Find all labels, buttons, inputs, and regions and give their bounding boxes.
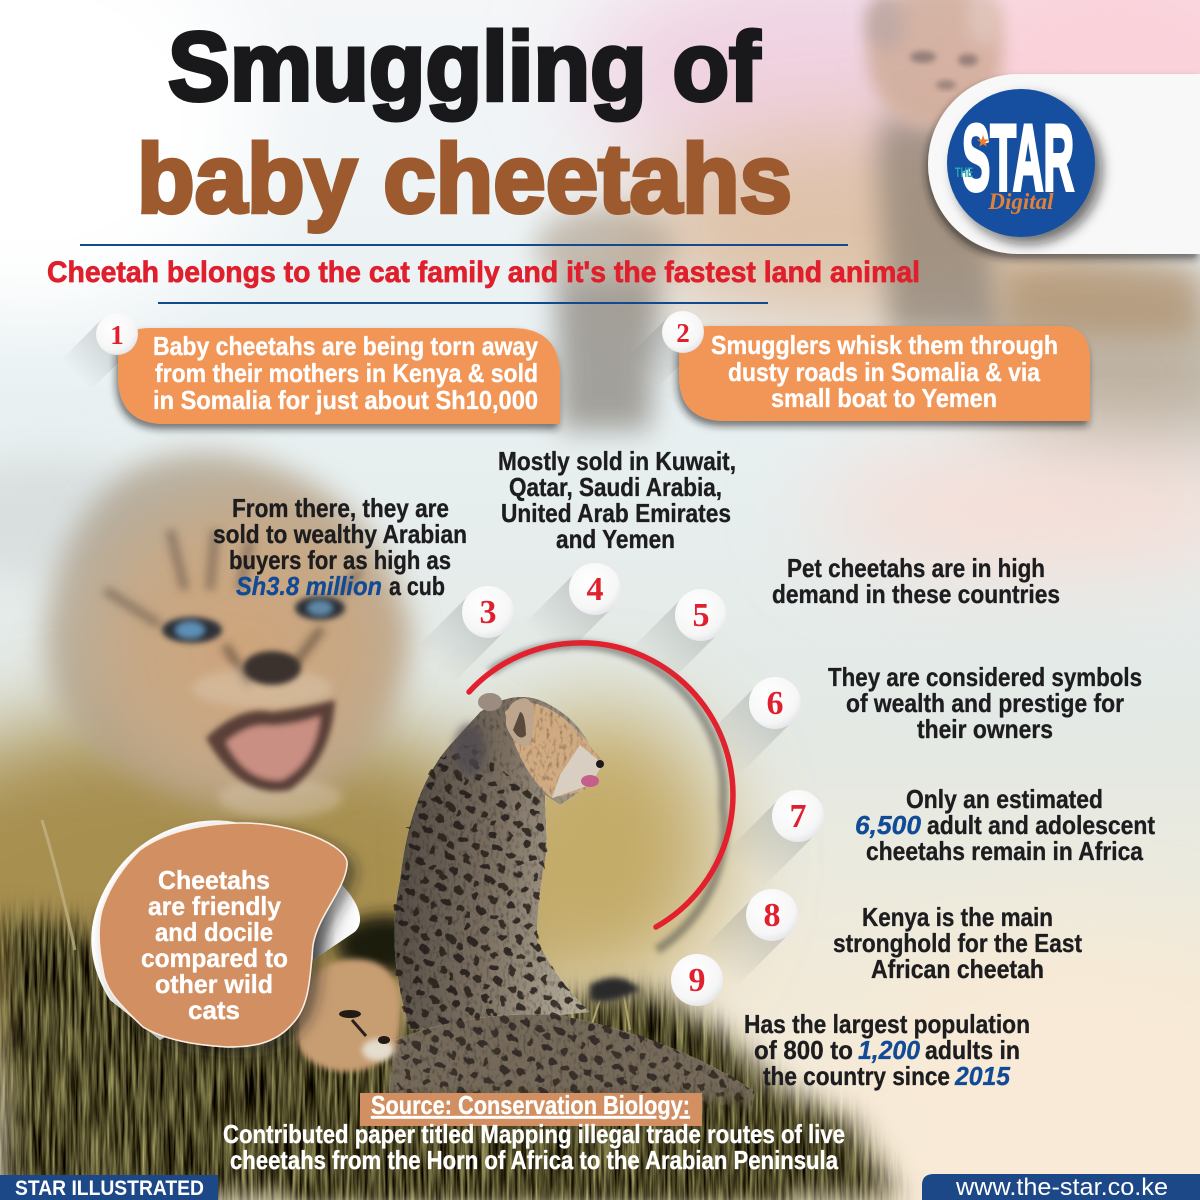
step 4: Mostly sold in Kuwait, — [498, 446, 736, 476]
foreground grass — [280, 1085, 800, 1200]
ghost cub: large crying face — [45, 452, 412, 818]
step 5: Pet cheetahs are in high — [787, 553, 1045, 583]
step 8: stronghold for the East — [833, 928, 1082, 958]
step 8: Kenya is the main — [862, 902, 1053, 932]
grass meadow — [0, 898, 914, 1200]
callout 2 — [623, 311, 1090, 421]
step 5 — [623, 553, 1060, 693]
step 3: a cub — [389, 571, 445, 601]
step 9: Has the largest population — [744, 1009, 1030, 1039]
footer left: STAR ILLUSTRATED — [15, 1177, 204, 1200]
step 7 — [720, 784, 1155, 894]
step 3: sold to wealthy Arabian — [213, 519, 467, 549]
subtitle with rules: Cheetah belongs to the cat family and it's the fastest land animal — [47, 256, 920, 289]
source note — [223, 1090, 845, 1175]
step 9 — [671, 954, 1030, 1091]
step 3 — [213, 493, 514, 690]
ghost cub: behind heading — [535, 208, 675, 430]
callout 1: from their mothers in Kenya & sold — [155, 358, 538, 388]
step 6: They are considered symbols — [828, 662, 1142, 692]
logo badge: THE — [955, 164, 973, 180]
step 7: cheetahs remain in Africa — [866, 836, 1143, 866]
step 7: Only an estimated — [906, 784, 1103, 814]
blob callout: other wild — [155, 969, 273, 999]
step 7: adult and adolescent — [927, 810, 1155, 840]
step 9: 9 — [688, 962, 706, 999]
blob callout: cats — [188, 995, 240, 1025]
callout 1: in Somalia for just about Sh10,000 — [153, 385, 538, 415]
callout 2: Smugglers whisk them through — [711, 330, 1058, 360]
source note: cheetahs from the Horn of Africa to the Arabian Peninsula — [230, 1145, 838, 1175]
logo badge: Digital — [987, 189, 1054, 214]
callout 2: dusty roads in Somalia & via — [728, 357, 1040, 387]
step 3: buyers for as high as — [229, 545, 451, 575]
blob callout: are friendly — [148, 891, 282, 921]
blob callout: and docile — [155, 917, 273, 947]
step 4: 4 — [586, 571, 604, 608]
step 6: their owners — [917, 714, 1053, 744]
title: baby cheetahs — [137, 124, 792, 233]
step 9: the country since — [763, 1061, 950, 1091]
step 4: United Arab Emirates — [501, 498, 731, 528]
step 4 — [498, 446, 736, 667]
step 6: of wealth and prestige for — [846, 688, 1124, 718]
callout 1: 1 — [110, 320, 124, 350]
step 6 — [697, 662, 1142, 781]
step 7: 7 — [790, 798, 806, 835]
logo badge: ★ — [977, 133, 990, 149]
step 8: 8 — [764, 897, 780, 934]
step 9: of 800 to — [754, 1035, 853, 1065]
source note: Source: Conservation Biology: — [371, 1090, 690, 1120]
step 5: 5 — [692, 597, 710, 634]
ghost cub: top right — [865, 0, 1200, 335]
blob callout — [91, 820, 360, 1047]
blob callout: Cheetahs — [158, 865, 270, 895]
title — [137, 12, 792, 233]
step 3: Sh3.8 million — [236, 571, 382, 601]
callout 1 — [57, 313, 560, 424]
step 9: 2015 — [954, 1061, 1011, 1091]
callout 2: 2 — [676, 318, 690, 348]
step 3: 3 — [480, 594, 496, 631]
step 6: 6 — [766, 685, 784, 722]
logo tab — [928, 74, 1200, 254]
red arc — [469, 643, 733, 950]
lying cheetah cub — [296, 959, 755, 1170]
step 5: demand in these countries — [772, 579, 1060, 609]
step 8: African cheetah — [871, 954, 1044, 984]
step 8 — [694, 889, 1082, 993]
step 9: 1,200 — [858, 1035, 921, 1065]
title: Smuggling of — [168, 12, 761, 121]
callout 1: Baby cheetahs are being torn away — [153, 331, 538, 361]
callout 2: small boat to Yemen — [771, 383, 997, 413]
source note: Contributed paper titled Mapping illegal trade routes of live — [223, 1119, 845, 1149]
blob callout: compared to — [141, 943, 288, 973]
step 4: Qatar, Saudi Arabia, — [509, 472, 722, 502]
step 3: From there, they are — [232, 493, 449, 523]
sitting cheetah cub — [335, 693, 640, 1030]
logo badge — [947, 89, 1095, 237]
step 7: 6,500 — [855, 810, 922, 840]
step 4: and Yemen — [556, 524, 675, 554]
dry grass stalk — [42, 820, 630, 1030]
step 9: adults in — [925, 1035, 1020, 1065]
